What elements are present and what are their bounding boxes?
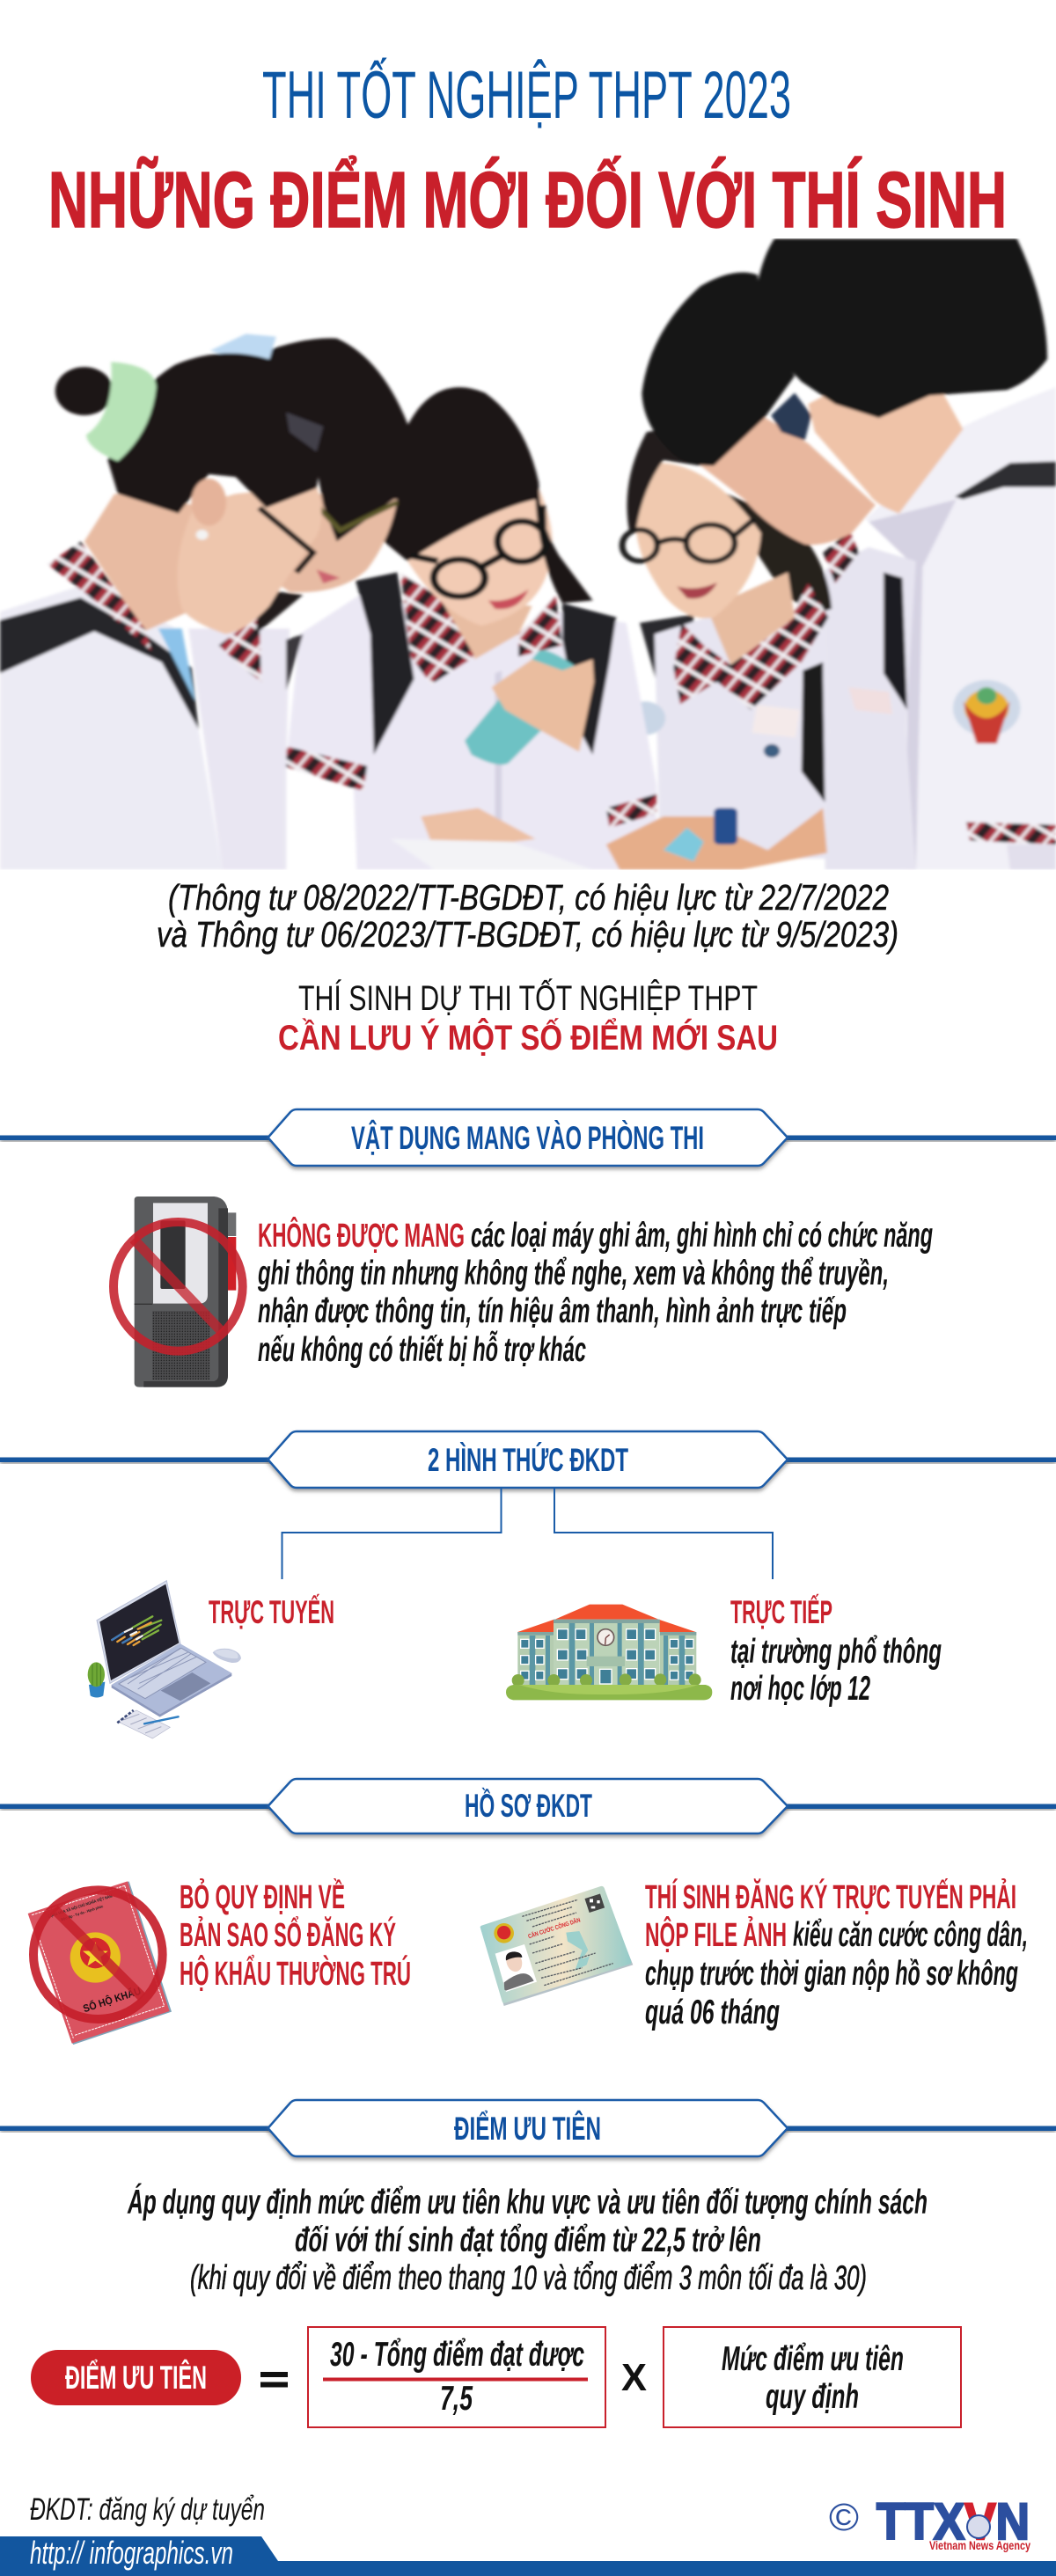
- equals sign: [260, 2372, 288, 2388]
- footnote: ĐKDT: đăng ký dự tuyển: [30, 2492, 265, 2527]
- sleeve plaid: [282, 746, 367, 791]
- formula term: điểm ưu tiên pill: [31, 2350, 241, 2405]
- logo: TTXVN: ©: [829, 2496, 859, 2539]
- section banner: 2 hình thức ĐKDT: [0, 1431, 1056, 1488]
- center girl neck: [443, 604, 533, 660]
- formula: [31, 2327, 961, 2427]
- icon: citizen ID card: CĂN CƯỚC CÔNG DÂN: [527, 1916, 582, 1940]
- text block: thí sinh đăng ký trực tuyến: quá 06 tháng: [645, 1994, 780, 2031]
- connector: banner to two registration forms: [282, 1488, 773, 1579]
- intro heading: THÍ SINH DỰ THI TỐT NGHIỆP THPT: [298, 977, 758, 1018]
- formula term: điểm ưu tiên pill: ĐIỂM ƯU TIÊN: [65, 2359, 207, 2396]
- boy E arm: [606, 808, 827, 870]
- label: trực tuyến: TRỰC TUYẾN: [209, 1594, 334, 1630]
- far right boy shirt: [865, 387, 1056, 870]
- person A face: [178, 486, 321, 634]
- formula box: mức điểm ưu tiên quy định: Mức điểm ưu tiên: [722, 2340, 904, 2378]
- title: [48, 58, 1007, 245]
- text block: bỏ quy định về bản sao sổ đăng ký: [180, 1877, 411, 1993]
- icon: prohibited voice recorder: [114, 1197, 243, 1387]
- formula fraction box: [308, 2327, 605, 2427]
- center girl straps: [356, 573, 414, 755]
- text block: bỏ quy định về bản sao sổ đăng ký: HỘ KHẨU THƯỜNG TRÚ: [180, 1953, 411, 1993]
- text block: thí sinh đăng ký trực tuyến: [645, 1877, 1028, 2031]
- icon: prohibited household register book: CỘNG HÒA XÃ HỘI CHỦ NGHĨA VIỆT NAM: [47, 1892, 113, 1919]
- icon: laptop: [88, 1581, 241, 1738]
- boy E face: [697, 415, 876, 545]
- center girl hair: [384, 387, 592, 604]
- section banner: vật dụng mang vào phòng thi: [0, 1109, 1056, 1166]
- section banner: 2 hình thức ĐKDT: 2 HÌNH THỨC ĐKDT: [428, 1441, 628, 1478]
- photo: group of students looking at a paper: [0, 238, 1056, 870]
- formula box: mức điểm ưu tiên quy định: quy định: [766, 2378, 859, 2416]
- text block: không được mang: nếu không có thiết bị hỗ trợ khác: [258, 1330, 586, 1369]
- section banner: hồ sơ ĐKDT: [0, 1779, 1056, 1833]
- right girl name tag + badge: [752, 705, 800, 737]
- phone: [465, 650, 592, 765]
- center girl collar: [400, 573, 475, 684]
- icon: school building: [506, 1605, 712, 1700]
- formula fraction box: 7,5: [440, 2380, 473, 2418]
- boy F face: [808, 376, 963, 514]
- text block: không được mang: [257, 1215, 933, 1369]
- footer bar with URL: http:// infographics.vn: [30, 2535, 233, 2571]
- boy E glasses: [771, 392, 811, 441]
- section banner: điểm ưu tiên: [0, 2100, 1056, 2156]
- label: trực tiếp tại trường phổ thông: nơi học lớp 12: [730, 1670, 870, 1708]
- label: trực tiếp tại trường phổ thông: TRỰC TIẾP: [730, 1594, 832, 1630]
- right girl straps + shirt: [640, 614, 693, 682]
- section banner: điểm ưu tiên: ĐIỂM ƯU TIÊN: [454, 2110, 601, 2147]
- intro heading: CẦN LƯU Ý MỘT SỐ ĐIỂM MỚI SAU: [278, 1016, 778, 1057]
- center girl glasses: [411, 505, 546, 596]
- icon: prohibited household register book: Độc lập - Tự do - Hạnh phúc: [61, 1904, 104, 1921]
- section banner: vật dụng mang vào phòng thi: VẬT DỤNG MANG VÀO PHÒNG THI: [351, 1119, 704, 1156]
- person A collar: [48, 541, 151, 651]
- text block: priority score rule: đối với thí sinh đạt tổng điểm từ 22,5 trở lên: [295, 2221, 761, 2259]
- text block: priority score rule: [127, 2183, 928, 2297]
- boy E shirt: [825, 547, 916, 870]
- center girl face: [404, 488, 553, 626]
- section banner: hồ sơ ĐKDT: HỒ SƠ ĐKDT: [465, 1787, 592, 1824]
- person A shirt: [0, 583, 223, 870]
- text block: thí sinh đăng ký trực tuyến: NỘP FILE ẢNH: [645, 1914, 787, 1954]
- legal basis text: và Thông tư 06/2023/TT-BGDĐT, có hiệu lực từ 9/5/2023): [157, 914, 898, 955]
- text block: không được mang: KHÔNG ĐƯỢC MANG: [258, 1215, 465, 1255]
- multiply sign: X: [621, 2356, 647, 2399]
- formula box: mức điểm ưu tiên quy định: [664, 2327, 961, 2427]
- boy F badge: [953, 680, 1020, 736]
- right girl glasses: [622, 519, 754, 561]
- boy F sleeve: [966, 822, 1056, 845]
- person A hair: [107, 354, 326, 514]
- legal basis text: (Thông tư 08/2022/TT-BGDĐT, có hiệu lực từ 22/7/2022: [168, 877, 889, 918]
- person A neck: [84, 494, 195, 632]
- icon: citizen ID card: [480, 1886, 633, 2006]
- hand on phone: [492, 659, 594, 752]
- icon: prohibited household register book: [28, 1881, 172, 2045]
- hands and paper: [421, 808, 535, 847]
- right girl hair behind: [726, 493, 834, 613]
- icon: prohibited household register book: SỔ HỘ KHẨU: [81, 1984, 143, 2015]
- right girl neck and face: [708, 573, 795, 665]
- logo: TTXVN: TTXVN: [876, 2493, 1030, 2550]
- footer bar with URL: [0, 2535, 1056, 2576]
- boy F strap: [955, 461, 1056, 500]
- intro heading: [278, 977, 778, 1057]
- right girl collar: [673, 583, 828, 710]
- legal basis text: [157, 877, 898, 955]
- boy F hair: [753, 238, 1047, 418]
- center girl shirt: [286, 583, 656, 870]
- person A strap: [0, 597, 199, 729]
- person B: [188, 628, 290, 870]
- text block: bỏ quy định về bản sao sổ đăng ký: BỎ QUY ĐỊNH VỀ: [180, 1877, 345, 1916]
- boy E hair: [642, 273, 795, 465]
- label: trực tiếp tại trường phổ thông: [730, 1594, 942, 1708]
- text block: bỏ quy định về bản sao sổ đăng ký: BẢN SAO SỔ ĐĂNG KÝ: [180, 1914, 396, 1954]
- formula fraction box: 30 - Tổng điểm đạt được: [330, 2336, 584, 2374]
